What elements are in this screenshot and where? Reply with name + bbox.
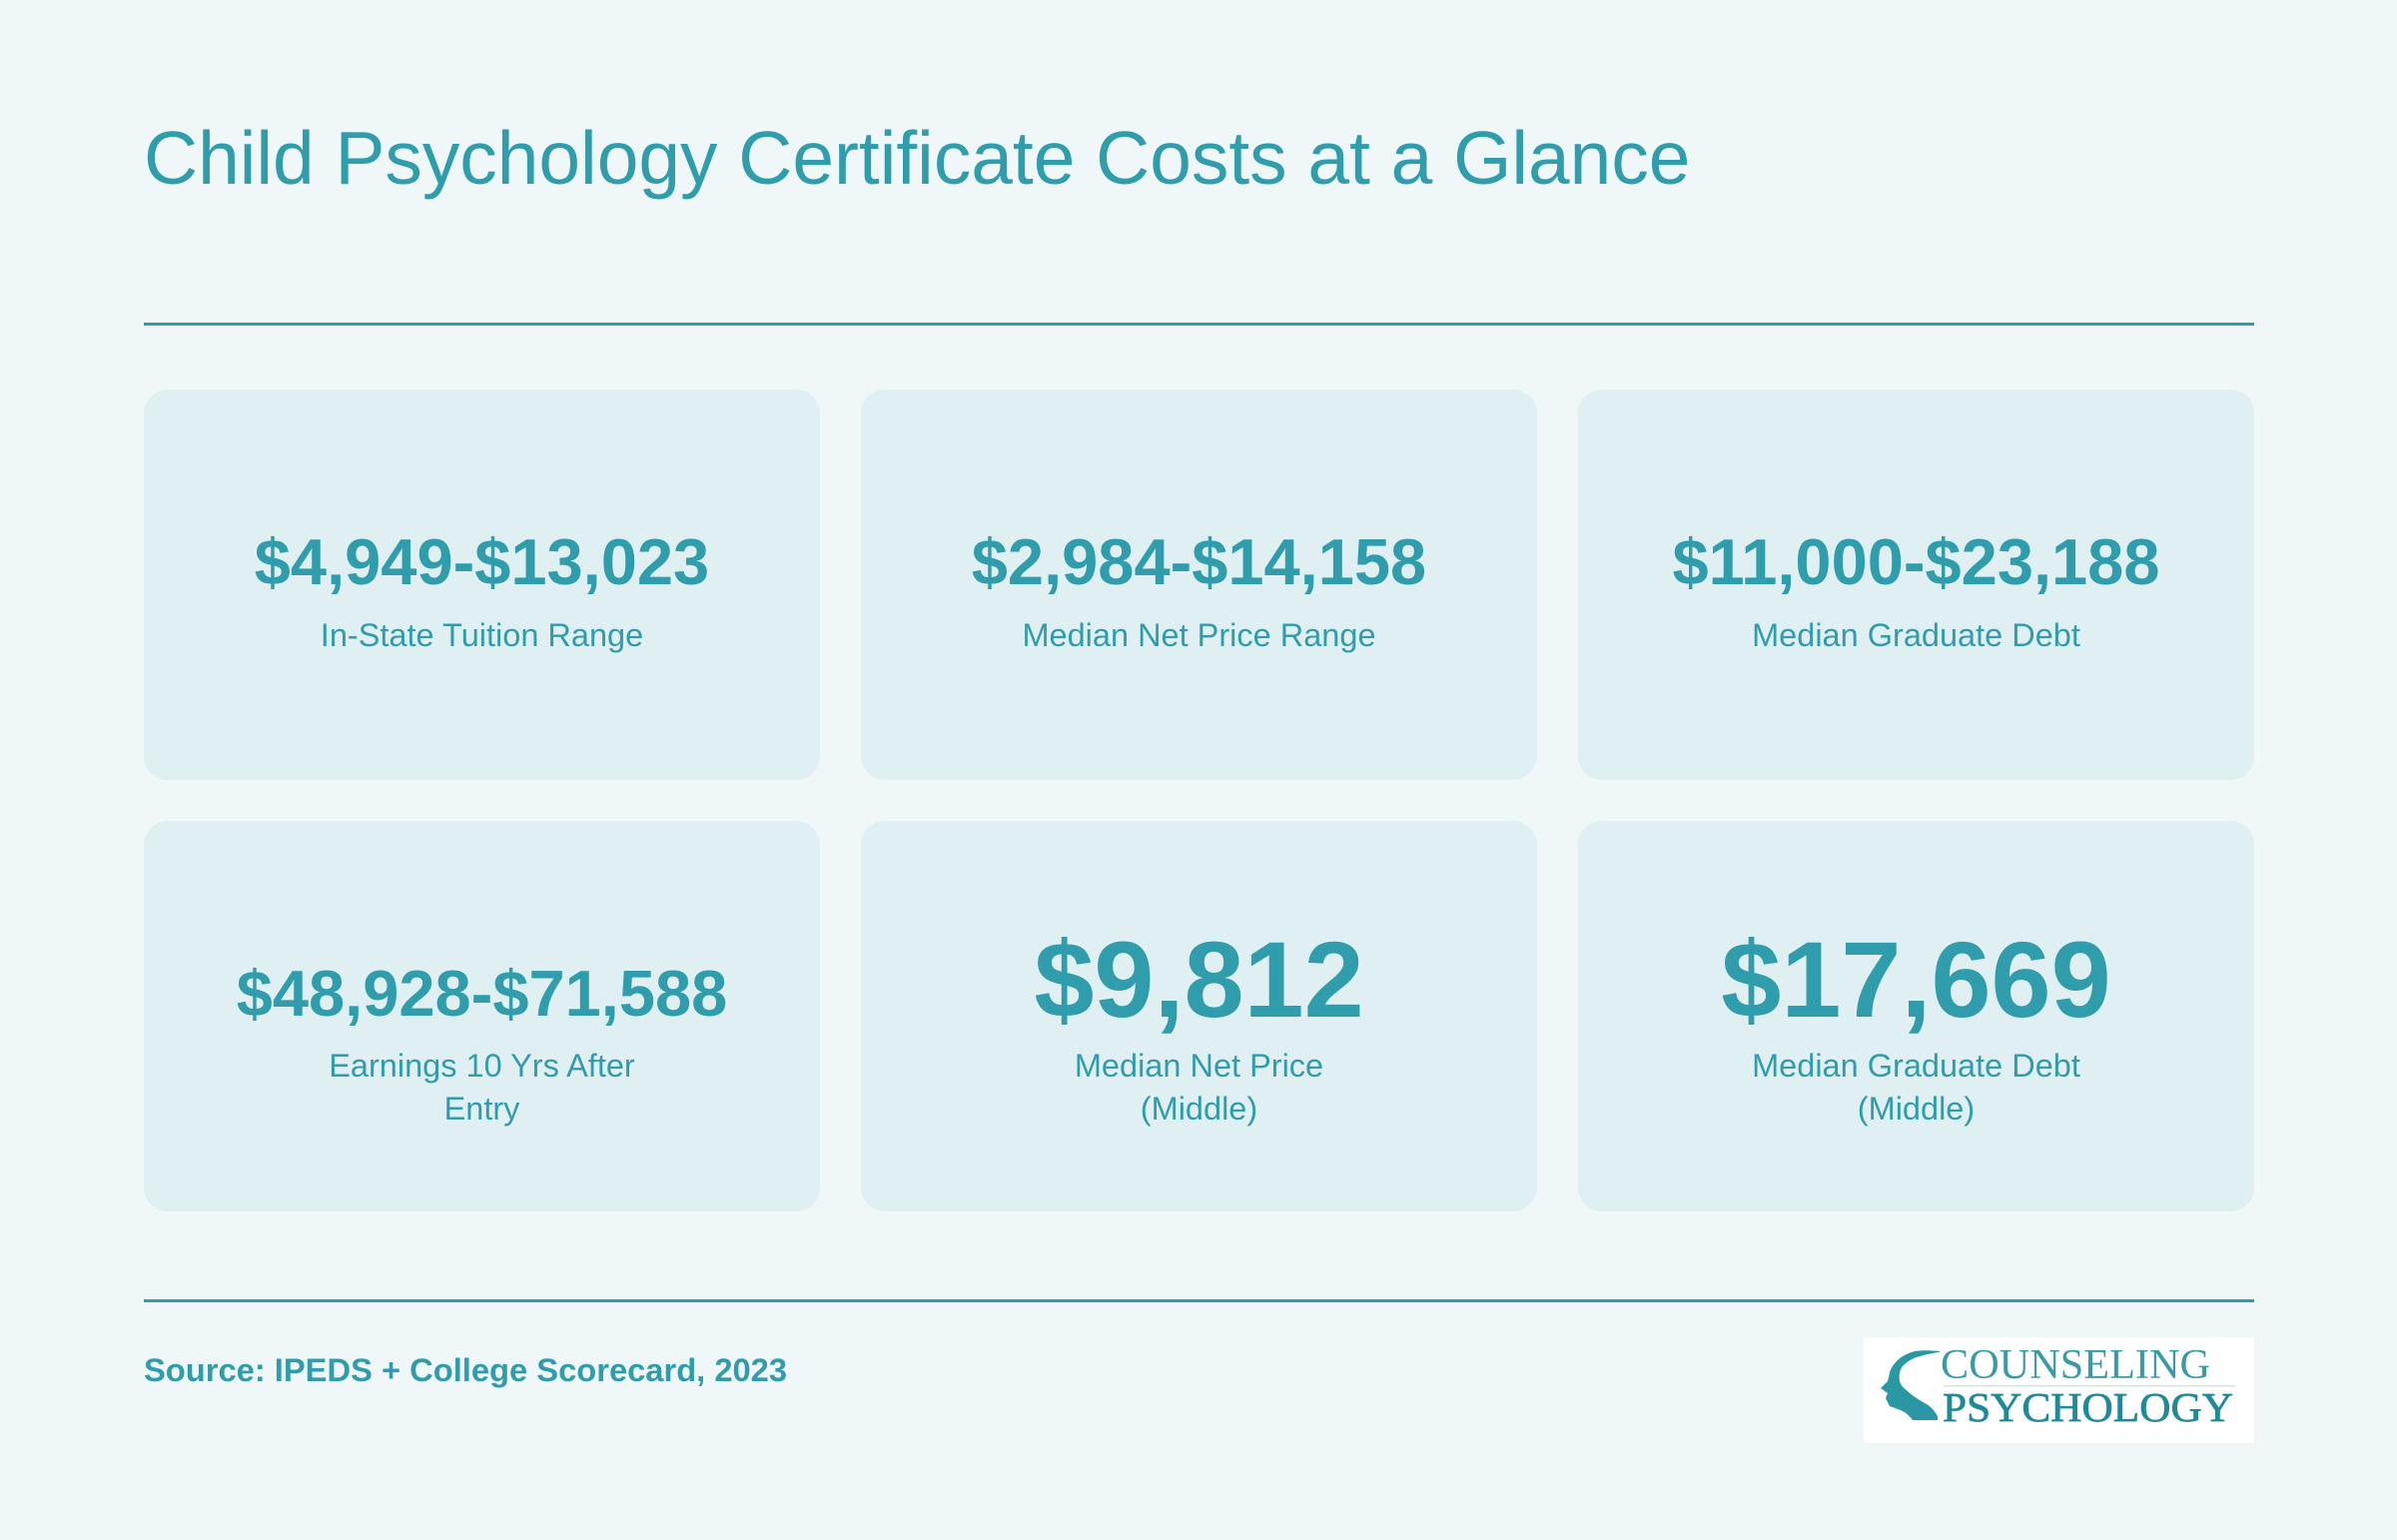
panel: median net price middle: [861, 821, 1537, 1211]
source note: Source: IPEDS + College Scorecard, 2023: [144, 1351, 787, 1388]
label: earnings: Entry: [444, 1091, 519, 1127]
logo: [1864, 1337, 2254, 1443]
label: earnings: [329, 1048, 635, 1127]
label: net price range: Median Net Price Range: [1022, 617, 1376, 653]
label: net price: (Middle): [1141, 1091, 1257, 1127]
label: graduate debt: Median Graduate Debt: [1752, 617, 2080, 653]
logo text: psychology: PSYCHOLOGY: [1943, 1384, 2233, 1430]
panel: earnings: [144, 821, 820, 1211]
label: graduate debt middle: [1752, 1048, 2080, 1127]
label: tuition: In-State Tuition Range: [321, 617, 643, 653]
panel: median net price range: [861, 389, 1537, 780]
value: earnings: $48,928-$71,588: [237, 957, 727, 1030]
value: graduate debt range: $11,000-$23,188: [1672, 525, 2159, 598]
icon: head silhouette: [1881, 1350, 1940, 1420]
label: earnings: Earnings 10 Yrs After: [329, 1048, 635, 1084]
label: net price: [1075, 1048, 1323, 1127]
value: net price: $9,812: [1034, 919, 1364, 1040]
value: graduate debt: $17,669: [1721, 919, 2111, 1040]
label: net price: Median Net Price: [1075, 1048, 1323, 1084]
value: tuition: $4,949-$13,023: [255, 525, 709, 598]
value: net price range: $2,984-$14,158: [972, 525, 1426, 598]
title: Child Psychology Certificate Costs at a Glance: [144, 116, 1690, 200]
label: graduate debt middle: (Middle): [1858, 1091, 1975, 1127]
label: graduate debt middle: Median Graduate Debt: [1752, 1048, 2080, 1084]
logo text: counseling: COUNSELING: [1941, 1342, 2210, 1388]
panel: in-state tuition range: [144, 389, 820, 780]
panel: median graduate debt: [1578, 389, 2254, 780]
panel: median graduate debt middle: [1578, 821, 2254, 1211]
